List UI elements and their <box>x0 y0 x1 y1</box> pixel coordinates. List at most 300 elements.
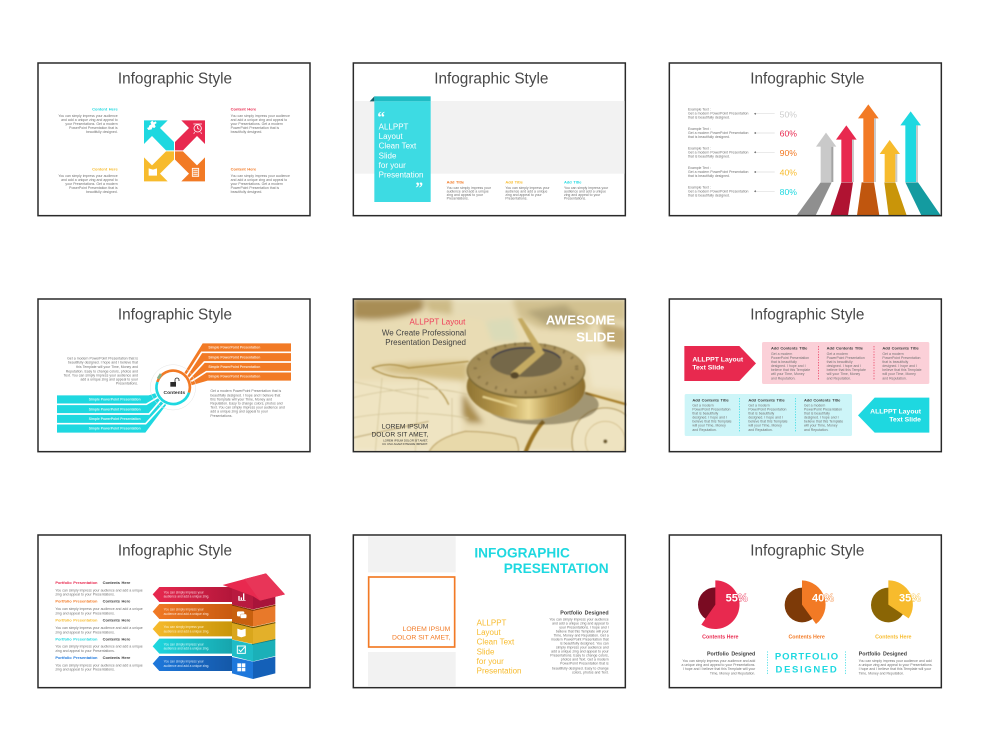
arrows chart <box>797 104 941 215</box>
row cyan: You can simply impress your audience and add a unique <box>55 645 143 649</box>
text block left: Get a modern PowerPoint Presentation that is <box>67 356 138 360</box>
text: add title cyan: Presentations. <box>564 197 586 201</box>
tier yellow: You can simply impress your <box>164 625 204 629</box>
tier yellow: audience and add a unique zing. <box>164 629 209 633</box>
column 2: designed. I hope and I <box>827 364 861 368</box>
tier orange: audience and add a unique zing. <box>164 612 209 616</box>
text: red block: PowerPoint Presentation that is <box>231 126 279 130</box>
text block left: Text. You can simply impress your audience and <box>64 373 138 377</box>
column 3: Add Contents Title <box>882 346 919 351</box>
column 2: Add Contents Title <box>748 397 785 402</box>
quadrant arrows diagram <box>144 120 205 181</box>
text: add title orange <box>447 180 492 201</box>
text: ALLPPT layout <box>382 318 466 347</box>
tier cyan: audience and add a unique zing. <box>164 647 209 651</box>
row yellow <box>55 618 143 634</box>
row orange: Contents Here <box>103 599 131 604</box>
portfolio text: add a unique zing and appeal to your <box>551 650 610 654</box>
pie 55% <box>698 580 748 641</box>
title: Infographic Style <box>434 71 548 88</box>
column 2: and Reputation. <box>748 428 773 432</box>
row orange: You can simply impress your audience and add a unique <box>55 607 143 611</box>
column 2: Add Contents Title <box>827 346 864 351</box>
tier cyan: You can simply impress your <box>164 642 204 646</box>
item 50%: Get a modern PowerPoint Presentation <box>688 112 749 116</box>
column 1: PowerPoint Presentation <box>771 356 809 360</box>
column 3: and Reputation. <box>882 376 907 380</box>
column 3: Add Contents Title <box>804 397 841 402</box>
ribbon callout: Slide <box>379 151 397 160</box>
text: awesome slide: SLIDE <box>576 329 615 344</box>
row yellow: You can simply impress your audience and add a unique <box>55 626 143 630</box>
item 60% <box>688 127 797 139</box>
icon: padlock <box>170 378 179 387</box>
arrow: red label: ALLPPT Layout <box>692 357 744 364</box>
text left: You can simply impress your audience and add <box>682 659 755 663</box>
ribbon callout: Presentation <box>379 170 424 179</box>
hub circle: Contents <box>164 390 185 396</box>
text: ALLPPT layout: ALLPPT Layout <box>410 318 466 327</box>
text block right: Presentations. <box>210 414 232 418</box>
text: orange block: PowerPoint Presentation that is <box>231 186 279 190</box>
orange frame with text: LOREM IPSUM <box>403 626 451 633</box>
item 80%: that is beautifully designed. <box>688 193 730 197</box>
text: add title yellow: Add Title <box>505 180 524 185</box>
text block right: add a unique zing and appeal to your <box>210 410 269 414</box>
yellow text: Layout <box>477 628 501 637</box>
portfolio text: your Presentations. I hope and I <box>559 626 609 630</box>
ribbon callout: ” <box>415 180 423 197</box>
portfolio text: colors, photos and Text. <box>572 671 609 675</box>
pie 55%: 55% <box>726 593 748 605</box>
text: cyan block: your Presentations. Get a modern <box>65 122 118 126</box>
text block right: this Template will your Time, Money and <box>210 397 272 401</box>
arrow: yellow book <box>144 151 174 181</box>
column 1: will your Time, Money <box>692 424 726 428</box>
text: orange block: Content Here <box>231 166 257 171</box>
row red: zing and appeal to your Presentations. <box>55 593 115 597</box>
item 60%: Get a modern PowerPoint Presentation <box>688 131 749 135</box>
column 2: designed. I hope and I <box>748 416 783 420</box>
cyan bars: Simple PowerPoint Presentation <box>89 417 141 421</box>
arrow: red label <box>684 346 756 381</box>
title: Infographic Style <box>750 71 864 88</box>
text: cyan block: Content Here <box>92 107 118 112</box>
list: example texts and percentages <box>688 108 797 197</box>
column 1 <box>692 397 732 432</box>
orange bars <box>184 343 291 385</box>
text: add title cyan: Add Title <box>564 180 582 185</box>
text: ALLPPT layout: Presentation Designed <box>385 338 466 347</box>
text: red block: You can simply impress your audience <box>231 114 290 118</box>
ribbon callout: Layout <box>379 132 403 141</box>
column 2: will your Time, Money <box>827 372 860 376</box>
panel: slide 6 contents panels <box>669 299 941 452</box>
tier cyan <box>153 639 275 661</box>
arrow orange <box>857 104 879 215</box>
column 1: will your Time, Money <box>771 372 805 376</box>
column 3: PowerPoint Presentation <box>882 356 921 360</box>
text block left: this Template will your Time, Money and <box>76 365 138 369</box>
item 50%: that is beautifully designed. <box>688 116 730 120</box>
column 3: Get a modern <box>804 404 825 408</box>
cyan bars: Simple PowerPoint Presentation <box>89 398 141 402</box>
column 3: Get a modern <box>882 352 904 356</box>
text block right: Text. You can simply impress your audience and <box>210 406 285 410</box>
text left: Portfolio Designed <box>707 652 755 658</box>
orange frame with text <box>369 577 455 647</box>
column 2 <box>827 346 866 380</box>
text block left: add a unique zing and appeal to your <box>80 377 139 381</box>
tier red with roof <box>153 573 285 609</box>
row yellow: zing and appeal to your Presentations. <box>55 630 115 634</box>
column 3: that is beautifully <box>804 412 830 416</box>
portfolio text: simply impress your audience and <box>556 646 609 650</box>
column 3: will your Time, Money <box>882 372 916 376</box>
portfolio text: beautifully designed. Easy to change <box>552 666 609 670</box>
center heading <box>768 651 846 676</box>
ribbon callout: “ <box>377 109 385 126</box>
text: red block: and add a unique zing and appeal to <box>231 118 287 122</box>
cyan bars: Simple PowerPoint Presentation <box>89 407 141 411</box>
text: lorem ipsum: DOLOR SIT AMET, <box>371 431 428 438</box>
text: awesome slide <box>546 313 615 344</box>
column 2: and Reputation. <box>827 376 851 380</box>
text: add title yellow <box>505 180 550 201</box>
text right: Portfolio Designed <box>859 652 907 658</box>
arrow red <box>830 125 857 215</box>
panel: slide 9 pies <box>669 535 941 688</box>
column 1: Add Contents Title <box>692 397 729 402</box>
column 1: Get a modern <box>692 404 714 408</box>
text: add title yellow: audience and add a unique <box>505 190 547 194</box>
panel: slide 4 contents hub <box>38 299 310 452</box>
text block right <box>210 389 285 418</box>
item 90% <box>688 146 797 158</box>
text: yellow block: beautifully designed. <box>86 190 118 194</box>
text left: a unique zing and appeal to your Presentations. <box>681 663 755 667</box>
title: Infographic Style <box>750 307 864 324</box>
column 2: PowerPoint Presentation <box>827 356 865 360</box>
text block left: beautifully designed. I hope and I believe that <box>68 361 138 365</box>
hub circle <box>150 365 196 410</box>
column 1: believe that this Template <box>771 368 810 372</box>
portfolio text: Presentations. Easy to change colors, <box>550 654 609 658</box>
orange bars: Simple PowerPoint Presentation <box>208 355 260 359</box>
ribbon callout: ALLPPT <box>379 122 409 131</box>
column 1: Get a modern <box>771 352 792 356</box>
column 3: PowerPoint Presentation <box>804 408 842 412</box>
item 60%: Example Text : <box>688 127 711 131</box>
text: yellow block: You can simply impress your audience <box>58 174 118 178</box>
text block left: Presentations. <box>116 382 138 386</box>
yellow text: for your <box>477 657 504 666</box>
photo: compass on antique map <box>354 299 626 452</box>
column 1: and Reputation. <box>692 428 717 432</box>
tier blue: audience and add a unique zing. <box>164 664 209 668</box>
pie 40%: 40% <box>812 593 834 605</box>
portfolio text: PowerPoint Presentation that is <box>560 662 609 666</box>
text: awesome slide: AWESOME <box>546 313 615 328</box>
stacked tiers <box>153 573 285 679</box>
text block right: Reputation. Easy to change colors, photos and <box>210 402 283 406</box>
pie 35%: Contents Here <box>875 635 912 641</box>
column 1: designed. I hope and I <box>771 364 806 368</box>
text: add title cyan <box>564 180 609 201</box>
title: Infographic Style <box>118 71 232 88</box>
text: orange block: You can simply impress your audience <box>231 174 290 178</box>
column 2: will your Time, Money <box>748 424 782 428</box>
arrow: cyan label: Text Slide <box>889 417 921 424</box>
pie 55%: Contents Here <box>702 635 739 641</box>
row orange: zing and appeal to your Presentations. <box>55 611 115 615</box>
column 1 <box>771 346 810 380</box>
column 3: designed. I hope and I <box>882 364 917 368</box>
text: add title yellow: You can simply impress your <box>505 186 550 190</box>
text left <box>681 652 756 675</box>
text: cyan block: PowerPoint Presentation that is <box>69 126 118 130</box>
portfolio text <box>549 611 610 675</box>
row blue <box>55 655 143 672</box>
text: add title yellow: Presentations. <box>505 197 527 201</box>
pie 40% <box>785 580 834 641</box>
orange bars: Simple PowerPoint Presentation <box>208 365 260 369</box>
row blue: zing and appeal to your Presentations. <box>55 668 115 672</box>
tier yellow <box>153 621 275 644</box>
pie 35%: 35% <box>899 593 921 605</box>
row red: You can simply impress your audience and add a unique <box>55 588 143 592</box>
panel: pink contents <box>762 342 929 384</box>
row red <box>55 580 143 597</box>
tier blue <box>153 656 275 679</box>
title: Infographic Style <box>118 307 232 324</box>
text right: Time, Money and Reputation. <box>859 671 904 675</box>
text: red block <box>231 107 290 134</box>
arrow: cyan label: ALLPPT Layout <box>870 408 922 415</box>
panel: slide 8 presentation <box>353 535 625 688</box>
arrow: red label: Text Slide <box>692 365 724 372</box>
center heading: DESIGNED <box>776 665 838 676</box>
row cyan: Contents Here <box>103 636 131 641</box>
text: orange block: and add a unique zing and appeal to <box>231 178 287 182</box>
text: yellow block: PowerPoint Presentation that is <box>69 186 118 190</box>
text: lorem ipsum: CU USU AGAM INTEGRE IMPEDIT. <box>382 442 428 446</box>
text: red block: Content Here <box>231 107 257 112</box>
column 1: that is beautifully <box>692 412 719 416</box>
heading <box>474 546 609 576</box>
text: add title orange: Presentations. <box>447 197 469 201</box>
column 1: designed. I hope and I <box>692 416 727 420</box>
text: add title orange: zing and appeal to your <box>447 193 484 197</box>
column 2: PowerPoint Presentation <box>748 408 787 412</box>
column 3: that is beautifully <box>882 360 909 364</box>
panel: slide 7 stacked house <box>38 535 310 688</box>
column 3 <box>804 397 843 432</box>
portfolio text: Portfolio Designed <box>560 611 609 617</box>
arrow cyan <box>900 111 941 215</box>
text rows <box>55 580 143 672</box>
arrow: cyan label <box>858 398 929 433</box>
arrow: cyan puzzle <box>144 120 174 150</box>
row red: Portfolio Presentation <box>55 580 98 585</box>
row cyan: zing and appeal to your Presentations. <box>55 649 115 653</box>
item 40%: that is beautifully designed. <box>688 174 730 178</box>
panel: cyan contents <box>685 394 852 436</box>
item 40%: Get a modern PowerPoint Presentation <box>688 170 749 174</box>
panel: slide 3 arrow chart <box>669 63 941 216</box>
item 50%: 50% <box>780 109 797 119</box>
portfolio text: believe that this Template will your <box>556 630 610 634</box>
column 2: believe that this Template <box>827 368 866 372</box>
column 2: believe that this Template <box>748 420 788 424</box>
cyan bars: Simple PowerPoint Presentation <box>89 427 141 431</box>
column 2: that is beautifully <box>827 360 853 364</box>
portfolio text: photos and Text. Get a modern <box>561 658 609 662</box>
item 60%: that is beautifully designed. <box>688 135 730 139</box>
column 1: PowerPoint Presentation <box>692 408 731 412</box>
text right: I hope and I believe that this Template will your <box>859 667 932 671</box>
column 2: that is beautifully <box>748 412 775 416</box>
row yellow: Portfolio Presentation <box>55 618 98 623</box>
text: cyan block: beautifully designed. <box>86 130 118 134</box>
pie 35% <box>871 580 921 641</box>
arrow yellow <box>880 140 907 215</box>
text: yellow block: Content Here <box>92 166 118 171</box>
text: add title cyan: You can simply impress your <box>564 186 609 190</box>
column 3: designed. I hope and I <box>804 416 839 420</box>
text: yellow block: your Presentations. Get a modern <box>65 182 118 186</box>
text: yellow block <box>58 166 118 194</box>
text left: Time, Money and Reputation. <box>710 671 755 675</box>
text: orange block <box>231 166 290 194</box>
text: yellow block: and add a unique zing and appeal to <box>61 178 118 182</box>
text: lorem ipsum: LOREM IPSUM <box>382 423 428 430</box>
text: cyan block <box>58 107 118 134</box>
center heading: PORTFOLIO <box>775 651 839 662</box>
title: Infographic Style <box>750 543 864 560</box>
text: add title cyan: zing and appeal to your <box>564 193 601 197</box>
portfolio text: and add a unique zing and appeal to <box>552 622 609 626</box>
text: lorem ipsum <box>371 423 428 446</box>
text: add title yellow: zing and appeal to your <box>505 193 542 197</box>
yellow text <box>477 618 522 675</box>
text: orange block: your Presentations. Get a modern <box>231 182 283 186</box>
text block left: Reputation. Easy to change colors, photos and <box>66 369 138 373</box>
orange bars: Simple PowerPoint Presentation <box>208 346 260 350</box>
portfolio text: Time, Money and Reputation. Get a <box>554 634 609 638</box>
row blue: Contents Here <box>103 655 131 660</box>
arrow: orange calculator <box>175 151 205 181</box>
yellow text: Slide <box>477 647 495 656</box>
text block right: beautifully designed. I hope and I believe that <box>210 393 280 397</box>
item 90%: Get a modern PowerPoint Presentation <box>688 150 749 154</box>
column 1: believe that this Template <box>692 420 732 424</box>
column 2: Get a modern <box>827 352 848 356</box>
text right: a unique zing and appeal to your Presentations. <box>859 663 933 667</box>
panel: slide 1 quadrant arrows <box>38 63 310 216</box>
item 80%: 80% <box>780 187 797 197</box>
ribbon callout: Clean Text <box>379 142 417 151</box>
row blue: Portfolio Presentation <box>55 655 98 660</box>
tier red with roof: audience and add a unique zing. <box>164 595 209 599</box>
column 2 <box>748 397 788 432</box>
tier blue: You can simply impress your <box>164 660 204 664</box>
item 80% <box>688 185 797 197</box>
row cyan: Portfolio Presentation <box>55 636 98 641</box>
text: add title orange: Add Title <box>447 180 465 185</box>
item 90%: that is beautifully designed. <box>688 154 730 158</box>
column 3: and Reputation. <box>804 428 829 432</box>
gray block bottom <box>368 652 456 687</box>
column 3 <box>882 346 922 380</box>
column 3: believe that this Template <box>804 420 843 424</box>
gray block top <box>368 536 456 572</box>
item 40%: 40% <box>780 168 797 178</box>
text right: You can simply impress your audience and add <box>859 659 932 663</box>
cyan bars <box>57 391 168 433</box>
row orange <box>55 599 143 615</box>
text: ALLPPT layout: We Create Professional <box>382 328 466 337</box>
tier orange: You can simply impress your <box>164 608 204 612</box>
ribbon callout <box>370 96 431 202</box>
row blue: You can simply impress your audience and add a unique <box>55 663 143 667</box>
column 3: will your Time, Money <box>804 424 838 428</box>
column 1: Add Contents Title <box>771 346 808 351</box>
heading: PRESENTATION <box>504 561 609 576</box>
yellow text: Presentation <box>477 666 522 675</box>
text: add title cyan: audience and add a unique <box>564 190 606 194</box>
pie 40%: Contents Here <box>788 635 825 641</box>
ribbon callout: for your <box>379 161 406 170</box>
column 1: and Reputation. <box>771 376 796 380</box>
item 80%: Example Text : <box>688 185 711 189</box>
row yellow: Contents Here <box>103 618 131 623</box>
text: cyan block: and add a unique zing and appeal to <box>61 118 118 122</box>
gray band <box>354 101 625 174</box>
yellow text: ALLPPT <box>477 618 507 627</box>
tier red with roof: You can simply impress your <box>164 590 204 594</box>
column 1: that is beautifully <box>771 360 797 364</box>
text right <box>859 652 933 675</box>
text: orange block: beautifully designed. <box>231 190 262 194</box>
item 60%: 60% <box>780 129 797 139</box>
text: lorem ipsum: LOREM IPSUM DOLOR SIT AMET, <box>383 438 428 442</box>
text: add title orange: You can simply impress your <box>447 186 492 190</box>
row orange: Portfolio Presentation <box>55 599 98 604</box>
text: red block: beautifully designed. <box>231 130 262 134</box>
title: Infographic Style <box>118 543 232 560</box>
tier orange <box>153 604 275 627</box>
arrow: red clock <box>175 120 205 150</box>
item 50% <box>688 108 797 120</box>
portfolio text: is beautifully designed. You can <box>560 642 609 646</box>
text left: I hope and I believe that this Template will your <box>683 667 756 671</box>
item 90%: Example Text : <box>688 146 711 150</box>
panel: slide 5 photo of sundial on map <box>352 298 626 452</box>
arrow gray <box>797 133 836 215</box>
item 40%: Example Text : <box>688 166 711 170</box>
item 50%: Example Text : <box>688 108 711 112</box>
text block left <box>64 356 139 386</box>
item 40% <box>688 166 797 178</box>
text: add title orange: audience and add a unique <box>447 190 489 194</box>
column 2: Get a modern <box>748 404 770 408</box>
portfolio text: You can simply impress your audience <box>549 618 609 622</box>
text: cyan block: You can simply impress your audience <box>58 114 118 118</box>
row cyan <box>55 636 143 653</box>
portfolio text: modern PowerPoint Presentation that <box>551 638 609 642</box>
item 80%: Get a modern PowerPoint Presentation <box>688 189 749 193</box>
